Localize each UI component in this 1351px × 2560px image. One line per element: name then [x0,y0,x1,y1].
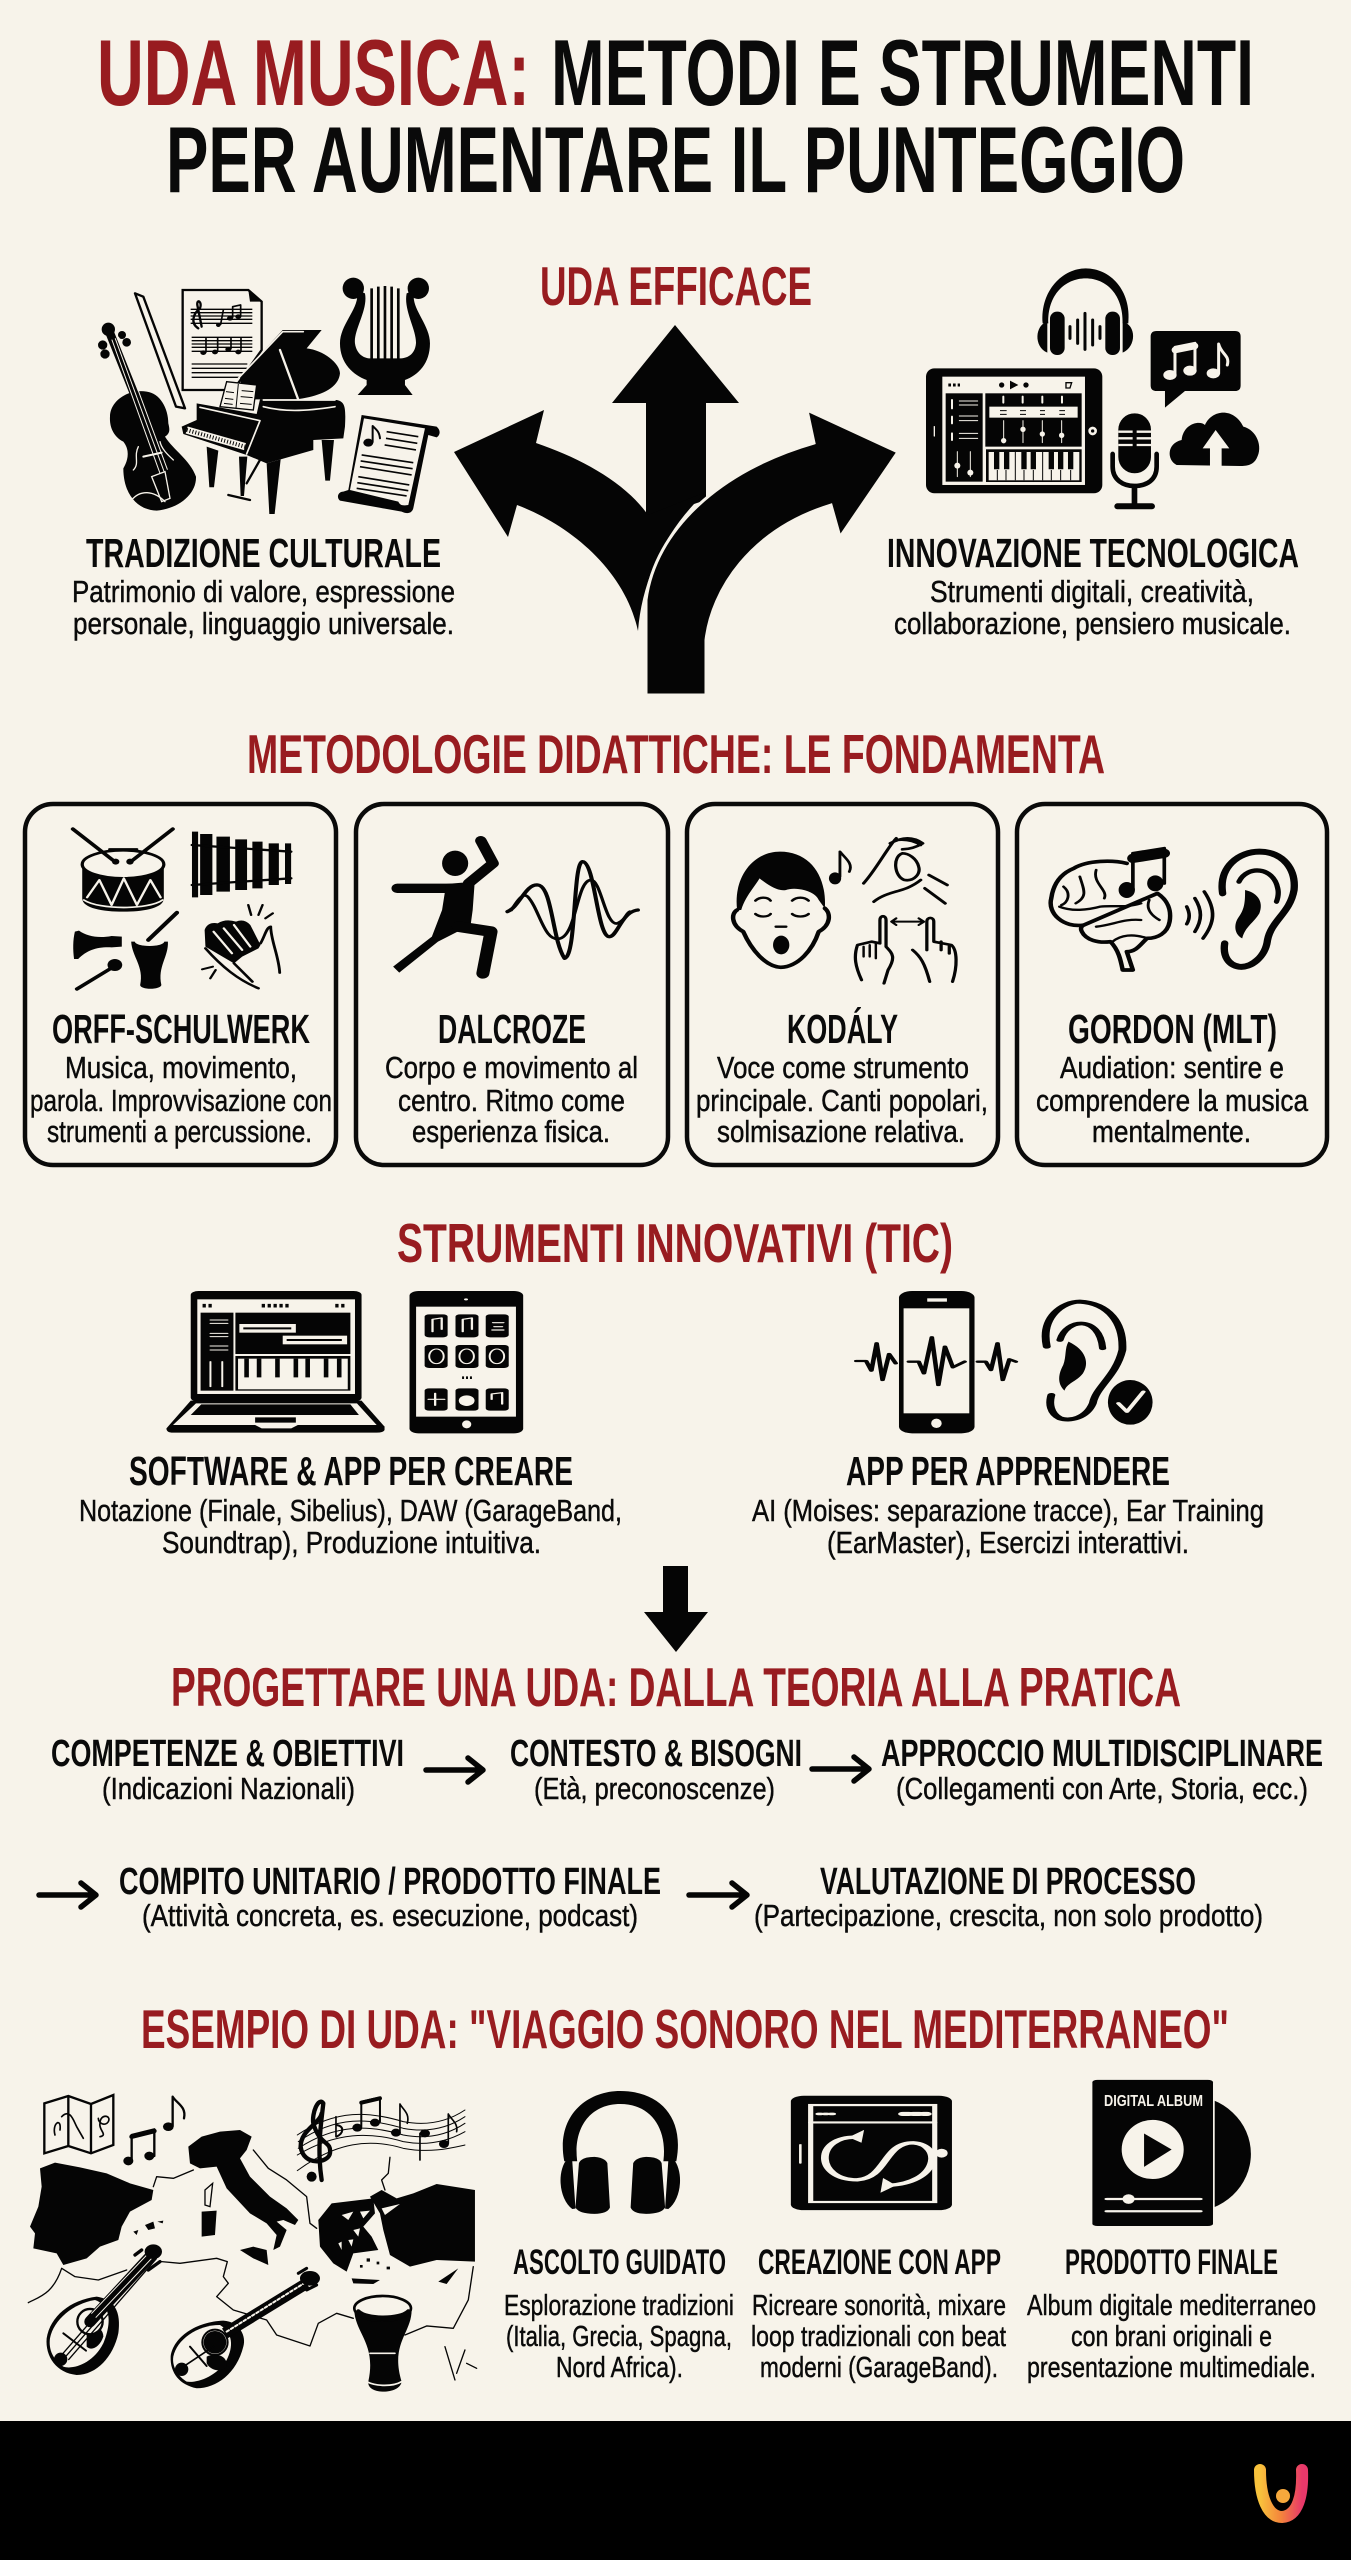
icon: headphones [562,2091,678,2214]
block: app per apprendere: (EarMaster), Esercizi interattivi. [827,1525,1189,1560]
block: tradizione culturale: personale, linguaggio universale. [73,606,454,641]
text: Gordon description [1036,1050,1309,1149]
icon: grand piano [182,330,345,514]
icon: three-way arrow [454,325,898,695]
block: app per apprendere: APP PER APPRENDERE [846,1448,1170,1494]
text: Kodály description: Voce come strumento [717,1050,969,1085]
panel: prodotto finale [1027,2080,1316,2384]
arrow: down [644,1566,708,1652]
icon: logo [1260,2470,1302,2517]
panel: ascolto guidato [504,2091,734,2384]
icon: headphones [1037,268,1133,355]
text: creazione description: moderni (GarageBand). [760,2352,998,2384]
text: Dalcroze description: Corpo e movimento al [385,1050,638,1085]
step: valutazione di processo [754,1861,1263,1933]
block: tradizione culturale [72,530,455,641]
arrow: step 1 to 2 [426,1758,483,1782]
block: innovazione tecnologica: Strumenti digitali, creatività, [930,574,1254,609]
step: valutazione di processo: (Partecipazione, crescita, non solo prodotto) [754,1898,1263,1933]
block: software e app per creare: Notazione (Finale, Sibelius), DAW (GarageBand, [79,1493,622,1528]
icon: brain, note and ear [1051,848,1294,970]
text: Orff description: Musica, movimento, [65,1050,297,1085]
footer band [0,2421,1351,2560]
arrow: step 2 to 3 [812,1757,869,1781]
block: tradizione culturale: Patrimonio di valore, espressione [72,574,455,609]
step: compito unitario [119,1861,661,1933]
icon: lyre [340,278,430,395]
step: contesto e bisogni [510,1733,802,1806]
heading: creazione con app: CREAZIONE CON APP [758,2243,1001,2282]
icon: music tablet [926,368,1102,493]
heading: ascolto guidato: ASCOLTO GUIDATO [513,2243,726,2282]
icon: cloud upload [1170,413,1259,466]
block: software e app per creare [79,1448,622,1560]
icon: music notes [123,2097,184,2165]
icon: digital album [1092,2080,1251,2226]
icon: phone with waveform [856,1291,1016,1433]
illustration: Mediterranean map [28,2095,477,2392]
icon: mandolin two [171,2268,320,2388]
step: approccio multidisciplinare [881,1733,1323,1806]
panel: creazione con app [751,2096,1006,2384]
icon: scroll [338,415,440,513]
text: prodotto description: con brani originali e [1071,2321,1272,2353]
icon: microphone [1113,413,1157,509]
step: compito unitario: COMPITO UNITARIO / PRODOTTO FINALE [119,1861,661,1903]
step: compito unitario: (Attività concreta, es. esecuzione, podcast) [142,1898,638,1933]
panel: Kodály [687,804,998,1165]
block: software e app per creare: SOFTWARE & APP PER CREARE [129,1448,573,1494]
text: creazione description: loop tradizionali con beat [751,2321,1006,2353]
text: ascolto description [504,2290,734,2384]
heading: strumenti innovativi: STRUMENTI INNOVATIVI (TIC) [397,1212,953,1274]
text: ascolto description: Esplorazione tradizioni [504,2290,734,2322]
heading: Orff-Schulwerk: ORFF-SCHULWERK [52,1006,310,1052]
step: competenze e obiettivi [51,1733,404,1806]
icon: music chat bubble [1151,331,1241,408]
icons: learning apps [856,1291,1153,1433]
icon: singing face and hand signs [733,838,956,983]
heading: Kodály: KODÁLY [787,1006,898,1052]
icon: sheet music [183,290,262,390]
step: competenze e obiettivi: COMPETENZE & OBIETTIVI [51,1733,404,1775]
step: contesto e bisogni: (Età, preconoscenze) [534,1771,775,1806]
text: Orff description [30,1050,332,1149]
icon: orff instruments [73,829,291,989]
icons: technology [926,268,1259,509]
icon: tablet with apps [410,1291,523,1433]
text: Kodály description: principale. Canti popolari, [696,1083,988,1118]
text: ascolto description: Nord Africa). [556,2352,683,2384]
icon: folded map [44,2095,113,2153]
icon: violin [98,323,196,511]
icon: laptop [166,1291,385,1433]
step: valutazione di processo: VALUTAZIONE DI PROCESSO [820,1861,1196,1903]
icon: treble clef and staff [297,2097,465,2182]
heading: UDA efficace: UDA EFFICACE [540,255,812,317]
icon: dancer and wave [393,841,638,973]
block: tradizione culturale: TRADIZIONE CULTURALE [86,530,441,576]
text: Kodály description [696,1050,988,1149]
text: Orff description: strumenti a percussione. [47,1114,312,1149]
panel: Orff-Schulwerk [25,804,336,1165]
step: contesto e bisogni: CONTESTO & BISOGNI [510,1733,802,1775]
map: coastlines [28,2150,477,2380]
text: Gordon description: comprendere la musica [1036,1083,1309,1118]
map: countries [30,2130,475,2284]
text: Dalcroze description: esperienza fisica. [412,1114,610,1149]
icons: creation devices [166,1291,523,1433]
text: creazione description [751,2290,1006,2384]
title: UDA MUSICA: [97,20,530,125]
icon: violin bow [135,293,185,408]
icon: tablet with loop [791,2096,952,2210]
icon: digital album: DIGITAL ALBUM [1104,2093,1203,2110]
text: Orff description: parola. Improvvisazione con [30,1083,332,1118]
arrow: step 4 to 5 [689,1883,747,1907]
block: innovazione tecnologica [887,530,1299,641]
text: Dalcroze description [385,1050,638,1149]
block: software e app per creare: Soundtrap), Produzione intuitiva. [162,1525,541,1560]
icon: djembe [354,2296,412,2392]
text: Dalcroze description: centro. Ritmo come [398,1083,625,1118]
panel: Gordon [1017,804,1327,1165]
icon: mandolin one [47,2244,162,2375]
heading: Dalcroze: DALCROZE [438,1006,586,1052]
icon: ear with check [1046,1302,1153,1425]
step: competenze e obiettivi: (Indicazioni Nazionali) [102,1771,355,1806]
text: Gordon description: mentalmente. [1092,1114,1251,1149]
text: creazione description: Ricreare sonorità, mixare [752,2290,1006,2322]
text: ascolto description: (Italia, Grecia, Spagna, [506,2321,732,2353]
text: Gordon description: Audiation: sentire e [1060,1050,1284,1085]
text: prodotto description [1027,2290,1316,2384]
icons: musical tradition [98,278,440,514]
title [97,20,1254,212]
text: Kodály description: solmisazione relativa. [717,1114,965,1149]
block: app per apprendere [752,1448,1264,1560]
panel: Dalcroze [356,804,668,1165]
arrow: step 3 to 4 [39,1883,96,1907]
